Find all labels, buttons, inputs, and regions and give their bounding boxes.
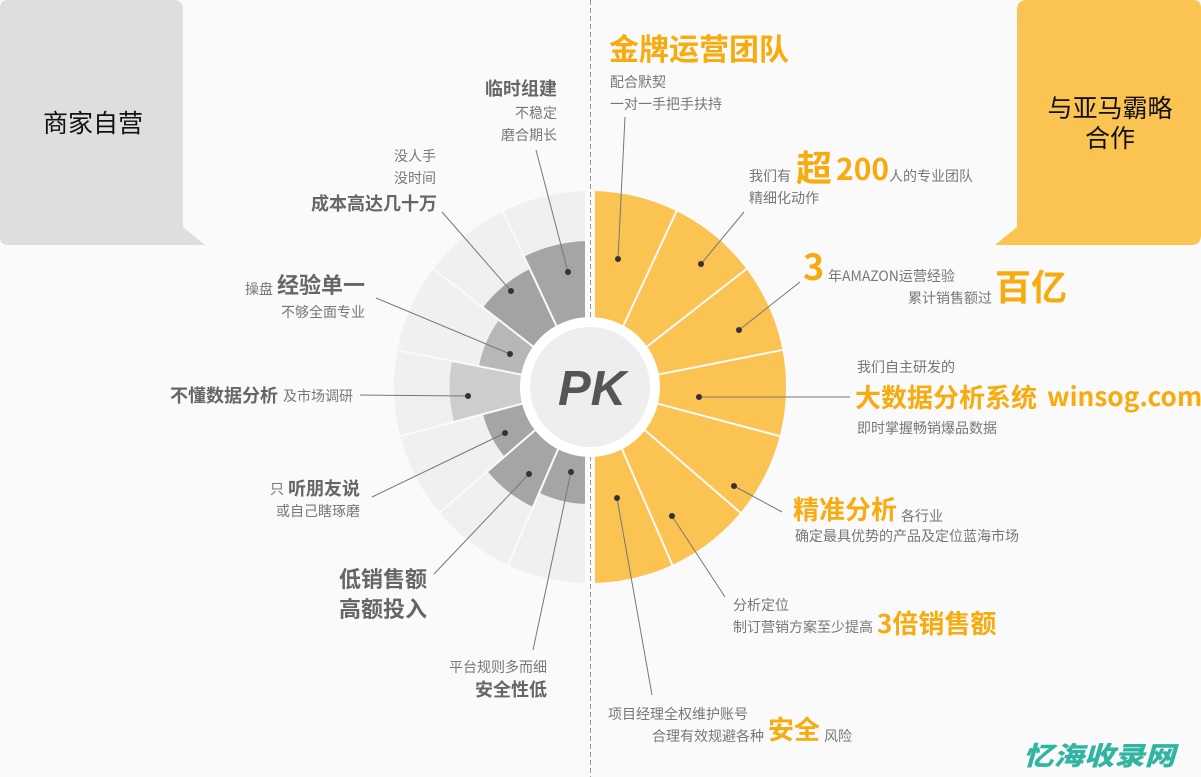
text: big data system: winsog.com [1047, 376, 1201, 414]
text: over 200 staff: 超 [796, 140, 832, 192]
chart: left half radial comparison [394, 192, 585, 582]
text: 3x sales: 分析定位 [733, 595, 789, 615]
text: limited experience: 操盘 [245, 279, 273, 299]
leader lines and dots: left [360, 150, 574, 650]
text: high cost: 没人手 [394, 146, 436, 166]
text: 3 years experience: 累计销售额过 [908, 288, 992, 308]
text: low sales: 低销售额 [339, 562, 427, 594]
text: over 200 staff [749, 140, 973, 208]
text: 3 years experience: 年AMAZON运营经验 [828, 266, 955, 286]
text: no data analysis: 及市场调研 [283, 386, 353, 406]
text: precise analysis: 精准分析 [793, 490, 897, 527]
text: safety: 项目经理全权维护账号 [608, 704, 748, 724]
text: over 200 staff: 我们有 [749, 166, 791, 186]
center PK badge: PK [558, 362, 630, 416]
text: safety [608, 704, 852, 747]
text: high cost: 成本高达几十万 [311, 190, 437, 216]
panel: merchant self-operated: 商家自营 [43, 104, 143, 140]
text: temporary team: 临时组建 [485, 75, 557, 101]
text: 3 years experience: 百亿 [995, 259, 1067, 311]
panel: partnership with Amazon overlord: 与亚马霸略 [1047, 89, 1173, 125]
text: temporary team [485, 75, 557, 145]
text: low safety: 安全性低 [475, 676, 547, 702]
text: limited experience: 经验单一 [277, 268, 365, 300]
chart: right half radial comparison [595, 191, 786, 583]
text: precise analysis: 各行业 [901, 506, 943, 526]
text: high cost: 没时间 [394, 168, 436, 188]
leader lines and dots: right [614, 117, 850, 695]
text: gold team: 配合默契 [610, 72, 666, 92]
text: safety: 风险 [824, 726, 852, 746]
text: high cost [311, 146, 437, 216]
text: 3x sales [733, 595, 996, 641]
text: temporary team: 磨合期长 [501, 125, 557, 145]
text: 3 years experience: 3 [803, 239, 824, 291]
text: gold team: 一对一手把手扶持 [610, 94, 722, 114]
text: hearsay: 听朋友说 [288, 475, 360, 501]
text: precise analysis [793, 490, 1019, 546]
text: no data analysis: 不懂数据分析 [170, 382, 278, 408]
text: hearsay: 只 [270, 479, 284, 499]
text: big data system: 大数据分析系统 [855, 378, 1037, 415]
text: low safety: 平台规则多而细 [449, 657, 547, 677]
panel: partnership with Amazon overlord [995, 0, 1201, 245]
text: gold team: 金牌运营团队 [609, 25, 789, 69]
text: big data system: 我们自主研发的 [857, 357, 955, 377]
text: precise analysis: 确定最具优势的产品及定位蓝海市场 [795, 526, 1019, 546]
text: 3x sales: 3倍销售额 [877, 604, 996, 641]
text: over 200 staff: 精细化动作 [749, 188, 819, 208]
text: hearsay: 或自己瞎琢磨 [276, 501, 360, 521]
text: safety: 合理有效规避各种 [652, 726, 764, 746]
text: limited experience: 不够全面专业 [281, 302, 365, 322]
text: 3 years experience [803, 239, 1067, 311]
text: over 200 staff: 200 [836, 145, 889, 189]
watermark: 忆海收录网 [1023, 736, 1179, 773]
panel: partnership with Amazon overlord: 合作 [1085, 119, 1135, 155]
text: temporary team: 不稳定 [515, 103, 557, 123]
text: low sales: 高额投入 [339, 592, 427, 624]
text: 3x sales: 制订营销方案至少提高 [733, 617, 873, 637]
text: safety: 安全 [768, 710, 820, 747]
panel: merchant self-operated [0, 0, 205, 245]
text: over 200 staff: 人的专业团队 [889, 166, 973, 186]
text: limited experience [245, 268, 365, 322]
text: no data analysis [170, 382, 353, 408]
text: hearsay [270, 475, 360, 521]
text: gold team [609, 25, 789, 114]
text: big data system: 即时掌握畅销爆品数据 [857, 418, 997, 438]
center PK badge [520, 317, 660, 457]
text: big data system [855, 357, 1201, 438]
text: low safety [449, 657, 547, 702]
text: low sales [339, 562, 427, 624]
